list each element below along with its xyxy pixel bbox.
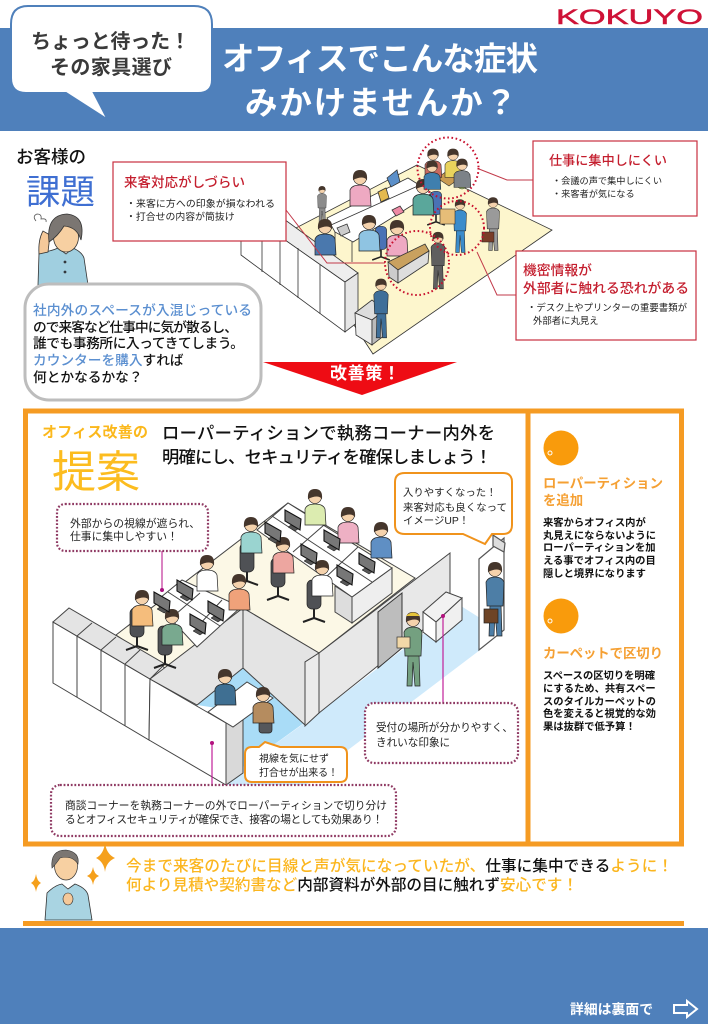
floor <box>292 165 552 354</box>
note body 1: 隠しと境界になります <box>543 567 646 580</box>
meeting table <box>208 682 273 727</box>
arrow: 改善策: 改善策！ <box>330 363 400 383</box>
highlight circles <box>385 138 484 295</box>
partition walls <box>149 553 450 785</box>
callout: 商談コーナー: 商談コーナーを執務コーナーの外でローパーティションで切り分け <box>65 799 387 812</box>
summary text <box>126 856 673 894</box>
blue corridor <box>226 606 480 786</box>
icon: orange circle 1 <box>544 430 578 466</box>
note body 2: スペースの区切りを明確 <box>543 669 655 682</box>
office floor <box>116 503 415 668</box>
panel: side notes <box>543 430 663 733</box>
callout: 商談コーナー: るとオフィスセキュリティが確保でき、接客の場としても効果あり！ <box>65 813 383 826</box>
callout: 受付の場所: きれいな印象に <box>376 736 450 749</box>
callout: 入りやすくなった <box>395 473 512 544</box>
header band <box>0 28 708 131</box>
meeting room carpet <box>197 668 340 767</box>
note body 2: スのタイルカーペットの <box>543 696 656 708</box>
callout: 商談コーナー <box>51 741 396 836</box>
speech bubble: customer problem: 社内外のスペースが入混じっている <box>33 302 252 318</box>
illustration: improved office <box>53 489 505 786</box>
note body 2: 色を変えると視覚的な効 <box>543 707 656 720</box>
title: オフィスでこんな症状 <box>222 41 538 77</box>
callout: 仕事に集中しにくい: ・会議の声で集中しにくい <box>552 175 662 186</box>
speech bubble: customer problem: 何とかなるかな？ <box>33 370 143 385</box>
office workers <box>132 489 392 645</box>
callout: 視線を気にせず: 打合せが出来る！ <box>259 766 338 779</box>
note body 1: 来客からオフィス内が <box>543 516 646 529</box>
callout: 視線を気にせず <box>245 742 347 782</box>
callout: 入りやすくなった: イメージUP！ <box>403 516 469 527</box>
heading: オフィス改善の提案 <box>42 423 148 497</box>
title: みかけませんか？ <box>245 85 517 121</box>
speech bubble: customer problem: 誰でも事務所に入ってきてしまう。 <box>33 336 244 351</box>
note heading: ローパーティションを追加: ローパーティション <box>543 476 663 491</box>
icon: worried customer <box>34 214 88 285</box>
cabinets <box>241 198 358 332</box>
heading: proposal statement: ローパーティションで執務コーナー内外を <box>162 423 495 443</box>
meeting group <box>424 149 471 189</box>
heading: オフィス改善の提案: 提案 <box>52 448 140 497</box>
heading: proposal statement <box>162 423 495 467</box>
callout: 外部からの視線 <box>57 504 208 592</box>
note body 2: にするため、共有スペー <box>543 682 656 695</box>
callout: 機密情報: 外部者に触れる恐れがある <box>523 280 689 296</box>
speech bubble: customer problem: ので来客など仕事中に気が散るし、 <box>33 319 238 335</box>
footer note: 詳細は裏面で: 詳細は裏面で <box>570 1001 653 1017</box>
callout: 機密情報: 外部者に丸見え <box>533 315 599 326</box>
callout: 来客対応がしづらい <box>113 162 286 241</box>
delivery person <box>397 612 422 686</box>
title <box>222 41 538 121</box>
speech bubble: ちょっと待った: その家具選び <box>50 56 172 79</box>
arrow: 改善策 <box>263 362 457 395</box>
icon: happy customer with sparkles <box>31 842 115 920</box>
note heading: ローパーティションを追加 <box>543 476 663 508</box>
visitor with bag <box>484 562 504 636</box>
panel: proposal frame <box>26 411 682 844</box>
callout: 来客対応がしづらい: ・打合せの内容が筒抜け <box>126 210 235 223</box>
copier <box>355 300 385 345</box>
callout: 受付の場所: 受付の場所が分かりやすく、 <box>376 721 513 734</box>
callout: 外部からの視線: 外部からの視線が遮られ、 <box>70 516 200 530</box>
illustration: current office <box>241 138 552 354</box>
staff at copier <box>374 279 388 338</box>
callout: 来客対応がしづらい: 来客対応がしづらい <box>124 174 245 190</box>
heading: proposal statement: 明確にし、セキュリティを確保しましょう！ <box>162 447 492 467</box>
logo: KOKUYO: KOKUYO <box>556 6 703 29</box>
callout: 受付の場所 <box>365 614 518 763</box>
callout: 入りやすくなった: 来客対応も良くなって <box>403 501 507 514</box>
cabinets <box>53 608 165 740</box>
meeting people <box>215 669 274 733</box>
reception desk <box>388 244 429 283</box>
speech bubble: customer problem: カウンターを購入すれば <box>33 352 184 368</box>
footer band <box>0 928 708 1024</box>
callout: 視線を気にせず: 視線を気にせず <box>259 752 329 765</box>
speech bubble: ちょっと待った <box>11 6 212 120</box>
chairs <box>126 543 325 668</box>
receptionist <box>387 220 408 256</box>
monitors <box>154 510 375 635</box>
callout: 機密情報: ・デスク上やプリンターの重要書類が <box>527 302 688 313</box>
summary text: 今まで来客のたびに目線と声が気になっていたが、仕事に集中できるように！ <box>126 856 673 875</box>
heading: お客様の課題 <box>16 147 95 212</box>
lower desk block <box>155 580 241 647</box>
callout: 機密情報: 機密情報が <box>523 262 592 278</box>
summary text: 何より見積や契約書など内部資料が外部の目に触れず安心です！ <box>126 875 578 894</box>
note heading: カーペットで区切り: カーペットで区切り <box>543 646 663 661</box>
note body 2: 果は抜群で低予算！ <box>543 720 636 733</box>
delivery person <box>440 199 466 253</box>
note body 1: える事でオフィス内の目 <box>543 554 656 567</box>
orange rule <box>23 921 684 926</box>
desks <box>327 170 432 262</box>
callout: 外部からの視線: 仕事に集中しやすい！ <box>70 529 178 543</box>
note body 1: ローパーティションを加 <box>543 541 656 554</box>
callout: 入りやすくなった: 入りやすくなった！ <box>403 487 497 499</box>
speech bubble: ちょっと待った: ちょっと待った！ <box>31 30 190 53</box>
callout: 仕事に集中しにくい <box>533 141 697 216</box>
note body 1 <box>543 516 656 580</box>
heading: お客様の課題: お客様の <box>16 147 86 167</box>
note heading: ローパーティションを追加: を追加 <box>543 493 583 508</box>
connector lines <box>286 169 533 295</box>
reception unit <box>423 592 462 642</box>
heading: お客様の課題: 課題 <box>26 174 95 212</box>
heading: オフィス改善の提案: オフィス改善の <box>42 423 148 441</box>
note body 2 <box>543 669 656 733</box>
door <box>378 593 402 668</box>
note body 1: 丸見えにならないように <box>543 529 656 542</box>
callout: 来客対応がしづらい: ・来客に方への印象が損なわれる <box>126 197 275 210</box>
callout: 仕事に集中しにくい: ・来客者が気になる <box>552 188 635 199</box>
callout: 機密情報 <box>516 251 696 340</box>
icon: orange circle 2 <box>544 598 578 634</box>
visitor with bag <box>482 197 499 251</box>
visitor in suit <box>431 232 445 289</box>
entrance partition <box>479 535 505 650</box>
speech bubble: customer problem <box>25 284 261 400</box>
people at desks <box>372 226 390 260</box>
arrow: footer <box>674 1001 697 1017</box>
upper desk block <box>257 503 392 623</box>
callout: 仕事に集中しにくい: 仕事に集中しにくい <box>549 153 667 168</box>
